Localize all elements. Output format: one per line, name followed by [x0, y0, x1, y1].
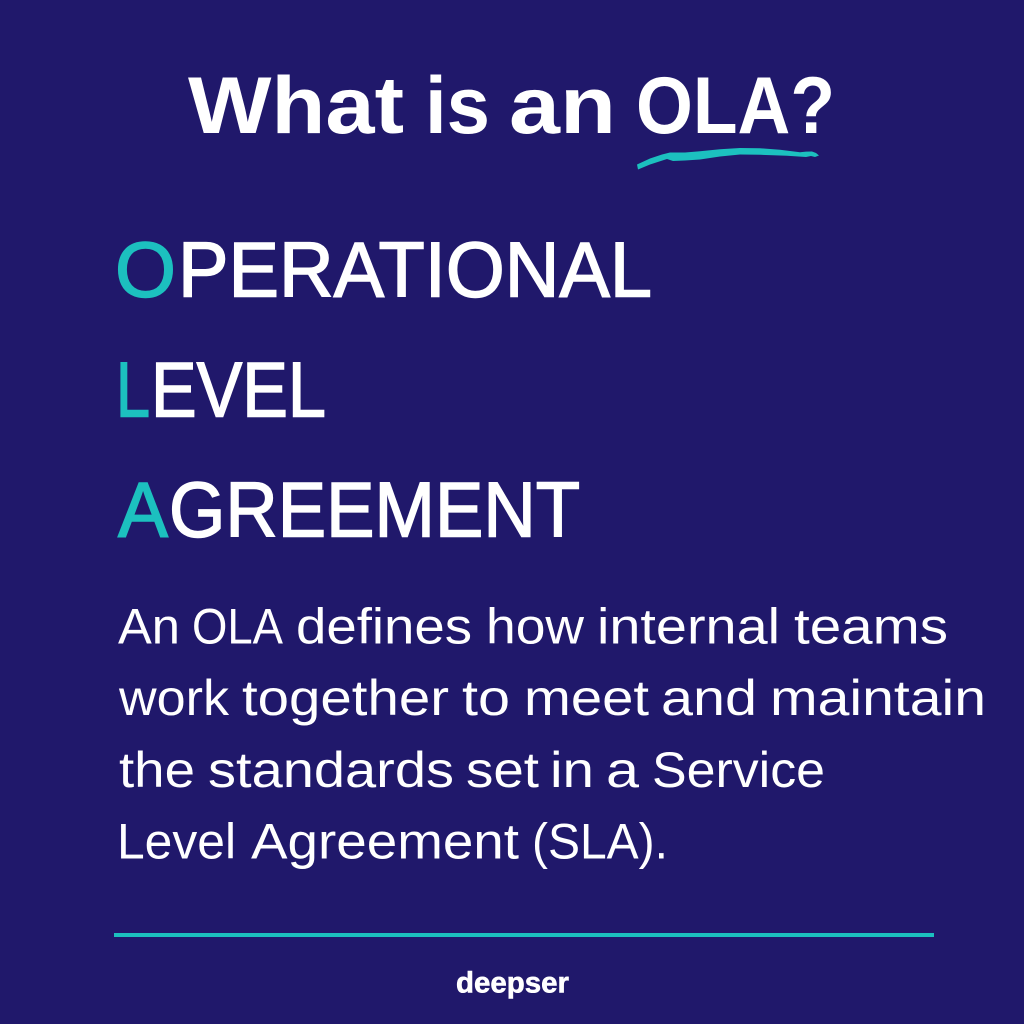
acronym line: level: EVEL	[151, 346, 326, 434]
description text: set	[466, 742, 539, 798]
description text: the	[119, 742, 195, 798]
description text: internal	[597, 598, 780, 654]
description text: in	[550, 742, 594, 798]
acronym line: operational: PERATIONAL	[178, 226, 652, 314]
acronym line: operational: O	[115, 226, 176, 314]
title: an	[509, 61, 616, 151]
acronym line: level: L	[116, 346, 150, 434]
description text: how	[486, 598, 585, 654]
acronym line: agreement: A	[118, 466, 168, 554]
description text: together	[242, 670, 449, 726]
description text: a	[606, 742, 639, 798]
description text: defines	[296, 598, 472, 654]
description text: (SLA).	[532, 814, 668, 870]
brush underline	[637, 148, 819, 170]
acronym line: agreement: GREEMENT	[169, 466, 580, 554]
description text	[117, 598, 986, 870]
description text: maintain	[770, 670, 986, 726]
title: OLA?	[636, 61, 835, 151]
description text: standards	[208, 742, 454, 798]
footer rule	[114, 933, 934, 937]
description text: teams	[794, 598, 948, 654]
description text: work	[118, 670, 230, 726]
description text: An	[118, 598, 180, 654]
description text: Agreement	[251, 814, 519, 870]
title	[188, 61, 835, 151]
description text: and	[661, 670, 757, 726]
title: is	[425, 61, 490, 151]
logo: deepser: deepser	[456, 966, 569, 1000]
title: What	[188, 61, 404, 151]
description text: Service	[652, 742, 825, 798]
description text: OLA	[192, 598, 284, 654]
description text: meet	[524, 670, 649, 726]
description text: Level	[117, 814, 236, 870]
description text: to	[462, 670, 510, 726]
